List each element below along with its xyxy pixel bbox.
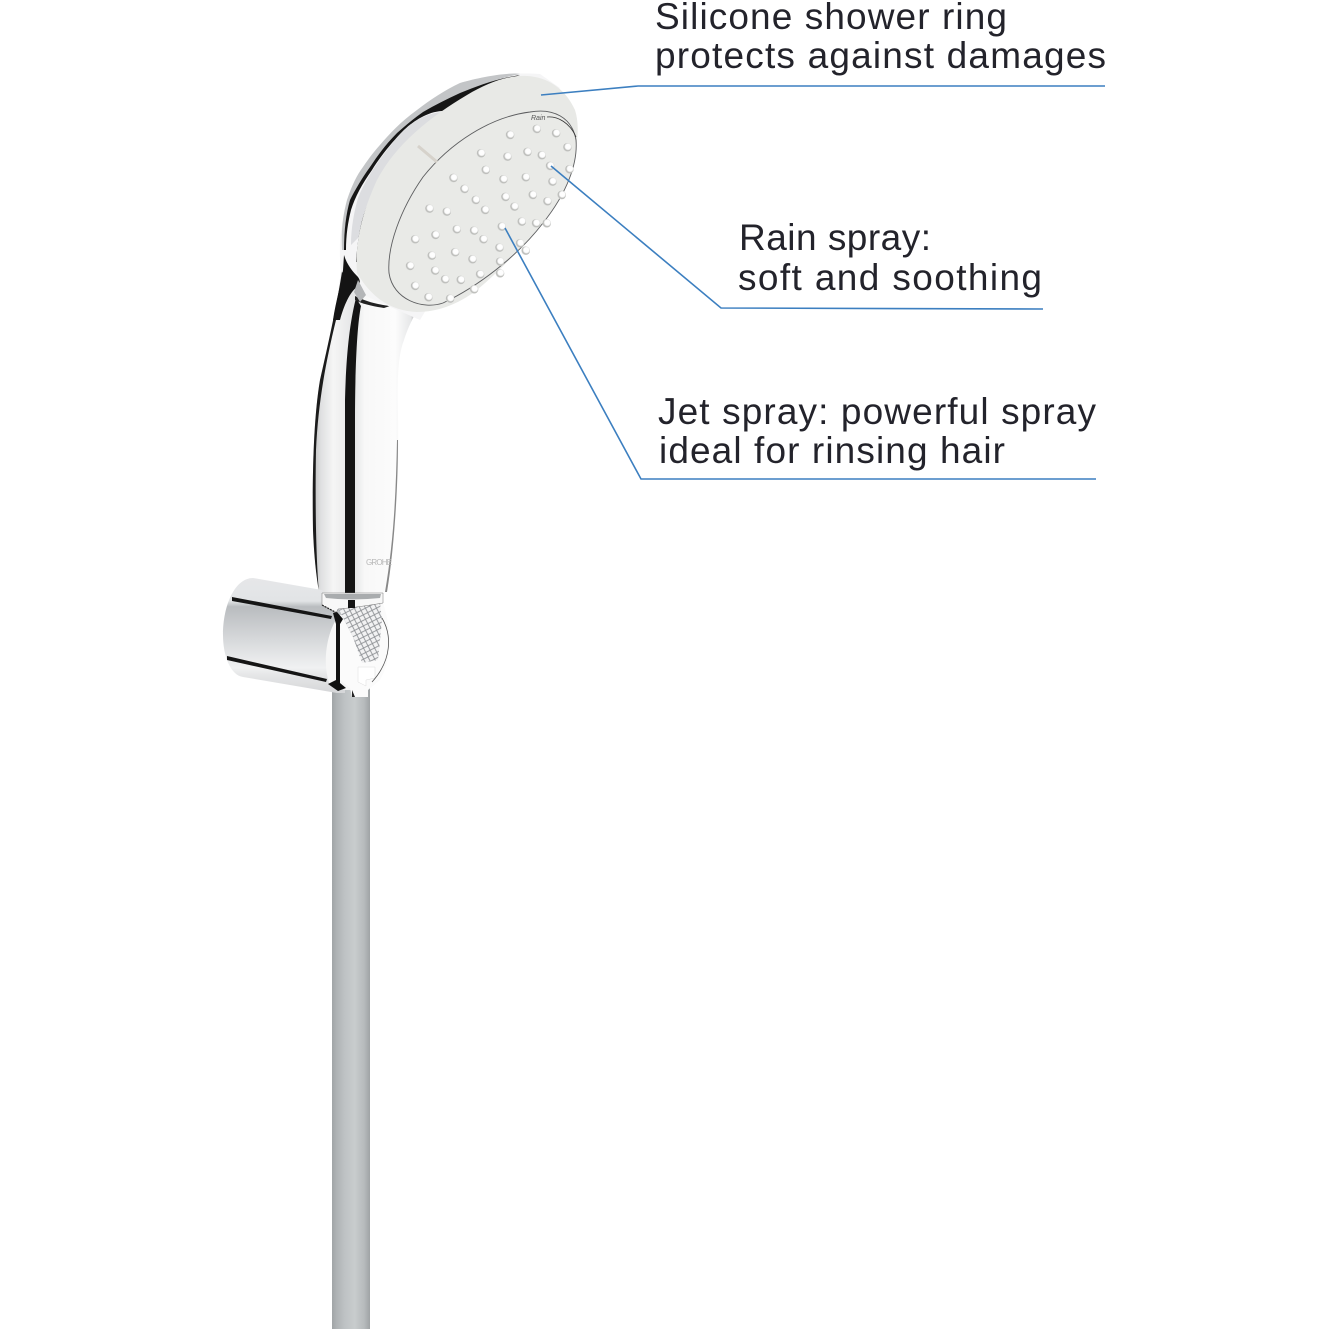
chrome highlight wedge (351, 112, 443, 245)
callout text: soft and soothing (738, 257, 1042, 298)
chrome back shell (340, 74, 560, 320)
callout text: Rain spray: (739, 217, 931, 258)
leader line (541, 86, 1105, 95)
spray face (389, 111, 576, 305)
spray nozzles (406, 125, 574, 303)
leader line (551, 166, 1043, 309)
leader line (505, 228, 1096, 479)
neck shadow (333, 255, 360, 320)
neck detail (354, 280, 366, 302)
dark reflection band (344, 75, 520, 250)
callout text: ideal for rinsing hair (659, 430, 1005, 471)
hose (332, 688, 370, 1329)
silicone ring (357, 76, 578, 312)
ring mark (418, 146, 437, 162)
holder joint shadows (328, 612, 346, 691)
neck reflection line (355, 296, 390, 308)
callout text: Jet spray: powerful spray (658, 391, 1096, 432)
rain label: Rain (531, 115, 546, 122)
holder cylinder (223, 578, 345, 693)
shower head (333, 74, 578, 320)
knurled swivel (338, 603, 382, 663)
outer grey band (342, 74, 520, 250)
callout: jet spray (505, 228, 1107, 479)
callout text: protects against damages (655, 35, 1106, 76)
wall holder (223, 578, 389, 697)
shower handle (313, 265, 416, 594)
collar (322, 593, 383, 613)
clip base (358, 667, 375, 686)
holder end cap (326, 618, 352, 690)
swivel body (340, 603, 389, 697)
handle central reflection (345, 298, 361, 593)
inner ring shadow line (357, 195, 373, 262)
logo mark: GROHE (366, 558, 392, 567)
handle left edge shadow (313, 265, 352, 592)
callout: rain spray (551, 166, 1043, 309)
clip arc (372, 618, 389, 682)
callout: silicone ring (541, 0, 1106, 95)
